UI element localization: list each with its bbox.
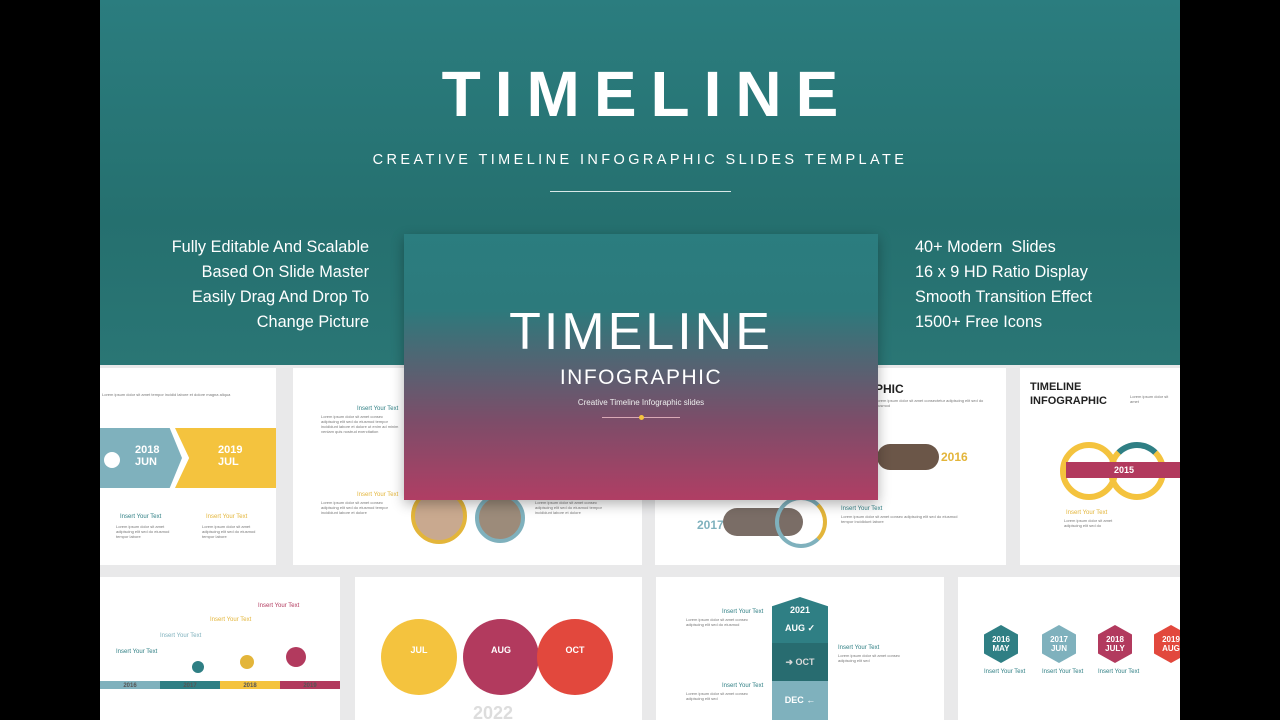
slide: hexagons: Insert Your Text xyxy=(722,683,763,689)
slide: circles: Lorem ipsum dolor sit amet consec adipiscing elit sed do eiusmod tempor incididunt labore et dolore xyxy=(321,500,388,515)
slide: infinity: INFOGRAPHIC xyxy=(1030,395,1107,407)
features left: Based On Slide Master xyxy=(202,263,369,281)
slide: circles: Insert Your Text xyxy=(357,492,398,498)
center card: Creative Timeline Infographic slides xyxy=(578,398,704,407)
features right xyxy=(915,238,1092,331)
slide: hexagons: AUG ✓ xyxy=(785,623,815,633)
features right: 1500+ Free Icons xyxy=(915,313,1042,331)
slide: month circles: AUG xyxy=(491,645,511,655)
slide: 2016 2017: PHIC xyxy=(875,382,904,396)
features left: Easily Drag And Drop To xyxy=(192,288,369,306)
slide: circles xyxy=(293,368,642,565)
slide: 2016 2017: 2016 xyxy=(941,450,968,464)
card subtitle: INFOGRAPHIC xyxy=(560,366,722,389)
slide: hex row xyxy=(958,577,1180,720)
slide: hexagons xyxy=(656,577,944,720)
slide: hex row: 2016 xyxy=(992,635,1010,644)
slide: hex row: AUG xyxy=(1162,644,1180,653)
slide: hex row: JULY xyxy=(1105,644,1125,653)
slide: 2016 2017: Lorem ipsum dolor sit amet consectetur adipiscing elit sed do eiusmod xyxy=(875,398,983,408)
slide: hex row: JUN xyxy=(1051,644,1067,653)
slide: hex row: 2019 xyxy=(1162,635,1180,644)
slide: 2018 2019 arrows: Lorem ipsum dolor sit amet adipiscing elit sed do eiusmod tempor labore xyxy=(202,524,255,539)
slide: hex row: MAY xyxy=(992,644,1010,653)
slide: infinity: TIMELINE xyxy=(1030,381,1081,393)
slide: steps: 2018 xyxy=(243,683,257,689)
card title: TIMELINE xyxy=(509,303,773,361)
slide: 2018 2019 arrows: Insert Your Text xyxy=(206,514,247,520)
slide: infinity xyxy=(1020,368,1180,565)
slide: hexagons: Lorem ipsum dolor sit amet consec adipiscing elit sed do eiusmod xyxy=(686,617,748,627)
slide: steps: Insert Your Text xyxy=(116,649,157,655)
slide: hexagons: Insert Your Text xyxy=(838,645,879,651)
slide: circles: Lorem ipsum dolor sit amet consec adipiscing elit sed do eiusmod tempor incididunt labore et dolore xyxy=(535,500,602,515)
slide: hex row: Insert Your Text xyxy=(1098,669,1139,675)
slide: hexagons: Lorem ipsum dolor sit amet consec adipiscing elit sed xyxy=(838,653,900,663)
slide: infinity: Lorem ipsum dolor sit amet xyxy=(1130,394,1168,404)
background top teal xyxy=(100,0,1180,368)
features left: Fully Editable And Scalable xyxy=(172,238,369,256)
slide: 2018 2019 arrows: Lorem ipsum dolor sit amet adipiscing elit sed do eiusmod tempor labore xyxy=(116,524,169,539)
slide: 2018 2019 arrows: Lorem ipsum dolor sit amet tempor incidid labore et dolore magna aliqua xyxy=(102,392,230,397)
slide: 2018 2019 arrows: 2018 xyxy=(135,444,159,456)
slide: month circles: JUL xyxy=(410,645,428,655)
features right: 16 x 9 HD Ratio Display xyxy=(915,263,1088,281)
features right: Smooth Transition Effect xyxy=(915,288,1092,306)
slide: steps: 2016 xyxy=(123,683,137,689)
slide: infinity: 2015 xyxy=(1114,465,1134,475)
features right: 40+ Modern Slides xyxy=(915,238,1056,256)
center card xyxy=(404,234,878,500)
slide: steps: Insert Your Text xyxy=(258,603,299,609)
slide: steps: Insert Your Text xyxy=(210,617,251,623)
slide: hexagons: Insert Your Text xyxy=(722,609,763,615)
slide: steps: 2019 xyxy=(303,683,317,689)
slide: steps xyxy=(100,577,340,720)
slide: hexagons: Lorem ipsum dolor sit amet consec adipiscing elit sed xyxy=(686,691,748,701)
slide: infinity: Insert Your Text xyxy=(1066,510,1107,516)
slide: hexagons: ➜ OCT xyxy=(785,657,815,667)
subtitle: CREATIVE TIMELINE INFOGRAPHIC SLIDES TEMPLATE xyxy=(373,152,907,168)
slide: circles: Lorem ipsum dolor sit amet consec adipiscing elit sed do eiusmod tempor incididunt labore et dolore ut enim ad minim veniam quis nostrud exercitation xyxy=(321,414,398,434)
slide: 2016 2017 xyxy=(655,368,1006,565)
slide: hex row: 2018 xyxy=(1106,635,1124,644)
slide: hex row: Insert Your Text xyxy=(1042,669,1083,675)
slide: 2016 2017: 2017 xyxy=(697,518,724,532)
slide: 2018 2019 arrows: JUL xyxy=(218,456,239,468)
slide: 2016 2017: Insert Your Text xyxy=(841,506,882,512)
slide: hexagons: DEC ← xyxy=(785,695,815,705)
slide: 2018 2019 arrows: 2019 xyxy=(218,444,242,456)
slide: hexagons: 2021 xyxy=(790,605,810,615)
slide: 2018 2019 arrows: JUN xyxy=(135,456,157,468)
slide: month circles: OCT xyxy=(566,645,584,655)
slide: hex row: 2017 xyxy=(1050,635,1068,644)
slide: infinity: Lorem ipsum dolor sit amet adipiscing elit sed do xyxy=(1064,518,1112,528)
slide: steps: 2017 xyxy=(183,683,197,689)
features left: Change Picture xyxy=(257,313,369,331)
slide: 2018 2019 arrows: Insert Your Text xyxy=(120,514,161,520)
features left xyxy=(172,238,369,331)
background bottom gray xyxy=(100,365,1180,720)
slide: circles: Insert Your Text xyxy=(357,406,398,412)
slide: month circles xyxy=(355,577,642,720)
slide: 2016 2017: Lorem ipsum dolor sit amet consec adipiscing elit sed do eiusmod tempor incididunt labore xyxy=(841,514,958,524)
title: TIMELINE xyxy=(442,58,852,130)
slide: 2018 2019 arrows xyxy=(100,368,276,565)
slide: hex row: Insert Your Text xyxy=(984,669,1025,675)
slide: steps: Insert Your Text xyxy=(160,633,201,639)
